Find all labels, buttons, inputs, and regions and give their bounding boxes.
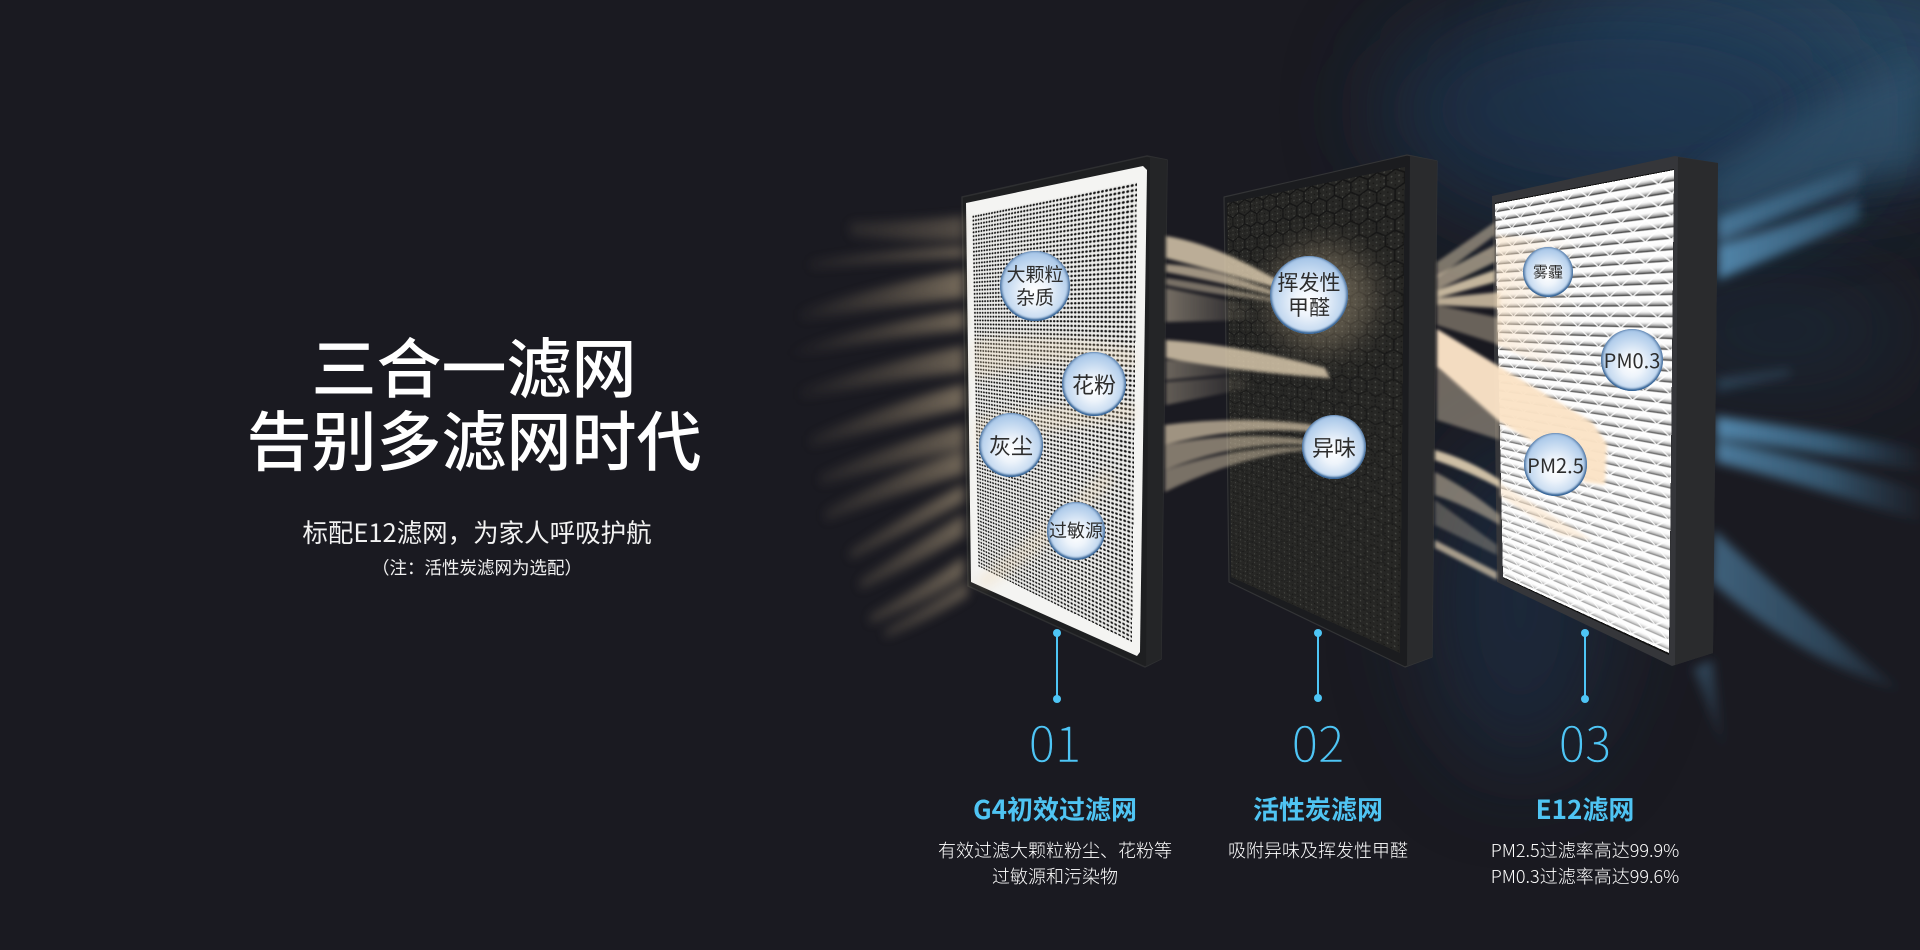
- description: PM2.5过滤率高达99.9%: [1491, 837, 1679, 863]
- icon: bubble PM0.3: PM0.3: [1604, 345, 1660, 374]
- heading carbon: 活性炭滤网: [1253, 790, 1383, 827]
- icon: bubble PM0.3: [1601, 329, 1663, 391]
- cream tint on filter 3 left edge: [1497, 235, 1575, 380]
- icon: bubble 雾霾: 雾霾: [1533, 261, 1563, 282]
- icon: bubble 大颗粒杂质: 大颗粒: [1006, 260, 1064, 287]
- streaks between filter 2 and filter 3: [1435, 222, 1500, 580]
- icon: bubble 挥发性甲醛: 挥发性: [1278, 267, 1340, 297]
- icon: bubble PM2.5: PM2.5: [1527, 450, 1584, 478]
- number 02: 02: [1292, 706, 1344, 777]
- icon: bubble 花粉: [1062, 352, 1126, 416]
- text block: filter 1: [938, 706, 1172, 889]
- filter 2 frame: [1224, 154, 1438, 668]
- panel: filter 3 E12 HEPA: [1492, 156, 1718, 666]
- subtitle: 标配E12滤网，为家人呼吸护航: [302, 513, 652, 550]
- connector 3: [1581, 629, 1589, 703]
- note: （注：活性炭滤网为选配）: [372, 555, 582, 580]
- icon: bubble 挥发性甲醛: 甲醛: [1288, 292, 1330, 322]
- number 01: 01: [1029, 706, 1081, 777]
- halo on filter 2: [1270, 246, 1374, 350]
- heading E12: E12滤网: [1536, 790, 1634, 827]
- icon: bubble 挥发性甲醛: [1270, 256, 1348, 334]
- description: PM0.3过滤率高达99.6%: [1491, 863, 1679, 889]
- icon: bubble 大颗粒杂质: [1000, 251, 1070, 321]
- title: 三合一滤网: [311, 317, 636, 411]
- left fan streaks into filter 1: [790, 216, 968, 638]
- title: 告别多滤网时代: [246, 390, 702, 484]
- filter 1 dotted mesh: [972, 182, 1137, 642]
- description: 吸附异味及挥发性甲醛: [1228, 837, 1408, 863]
- icon: bubble 异味: 异味: [1312, 431, 1356, 463]
- title: [246, 317, 702, 484]
- description: 有效过滤大颗粒粉尘、花粉等: [938, 837, 1172, 863]
- filter 3 frame: [1492, 156, 1718, 666]
- icon: bubble 异味: [1302, 415, 1366, 479]
- streaks between filter 1 and filter 2: [1165, 236, 1330, 492]
- icon: bubble 雾霾: [1523, 247, 1573, 297]
- filter 1 frame: [961, 155, 1168, 668]
- description: [1491, 837, 1679, 889]
- icon: bubble 灰尘: [979, 413, 1043, 477]
- description: 过敏源和污染物: [992, 863, 1118, 889]
- icon: bubble 过敏源: 过敏源: [1049, 517, 1103, 543]
- icon: bubble 大颗粒杂质: 杂质: [1016, 283, 1054, 310]
- icon: bubble PM2.5: [1524, 433, 1587, 496]
- number 03: 03: [1559, 706, 1611, 777]
- heading G4: G4初效过滤网: [973, 790, 1137, 827]
- text block: filter 3: [1491, 706, 1679, 889]
- icon: bubble 灰尘: 灰尘: [989, 429, 1033, 461]
- cream air band across filter 3: [1437, 329, 1607, 540]
- icon: bubble 过敏源: [1047, 502, 1105, 560]
- connector 1: [1053, 629, 1061, 703]
- filter 3 pleated mesh: [1495, 170, 1674, 653]
- connector 2: [1314, 629, 1322, 702]
- panel: filter 1 G4: [961, 155, 1168, 668]
- faint flow across filter 1: [975, 337, 1135, 590]
- text block: filter 2: [1228, 706, 1408, 863]
- icon: bubble 花粉: 花粉: [1072, 368, 1116, 400]
- filter 2 honeycomb mesh: [1227, 167, 1405, 653]
- panel: filter 2 activated carbon: [1224, 154, 1438, 668]
- description: [938, 837, 1172, 889]
